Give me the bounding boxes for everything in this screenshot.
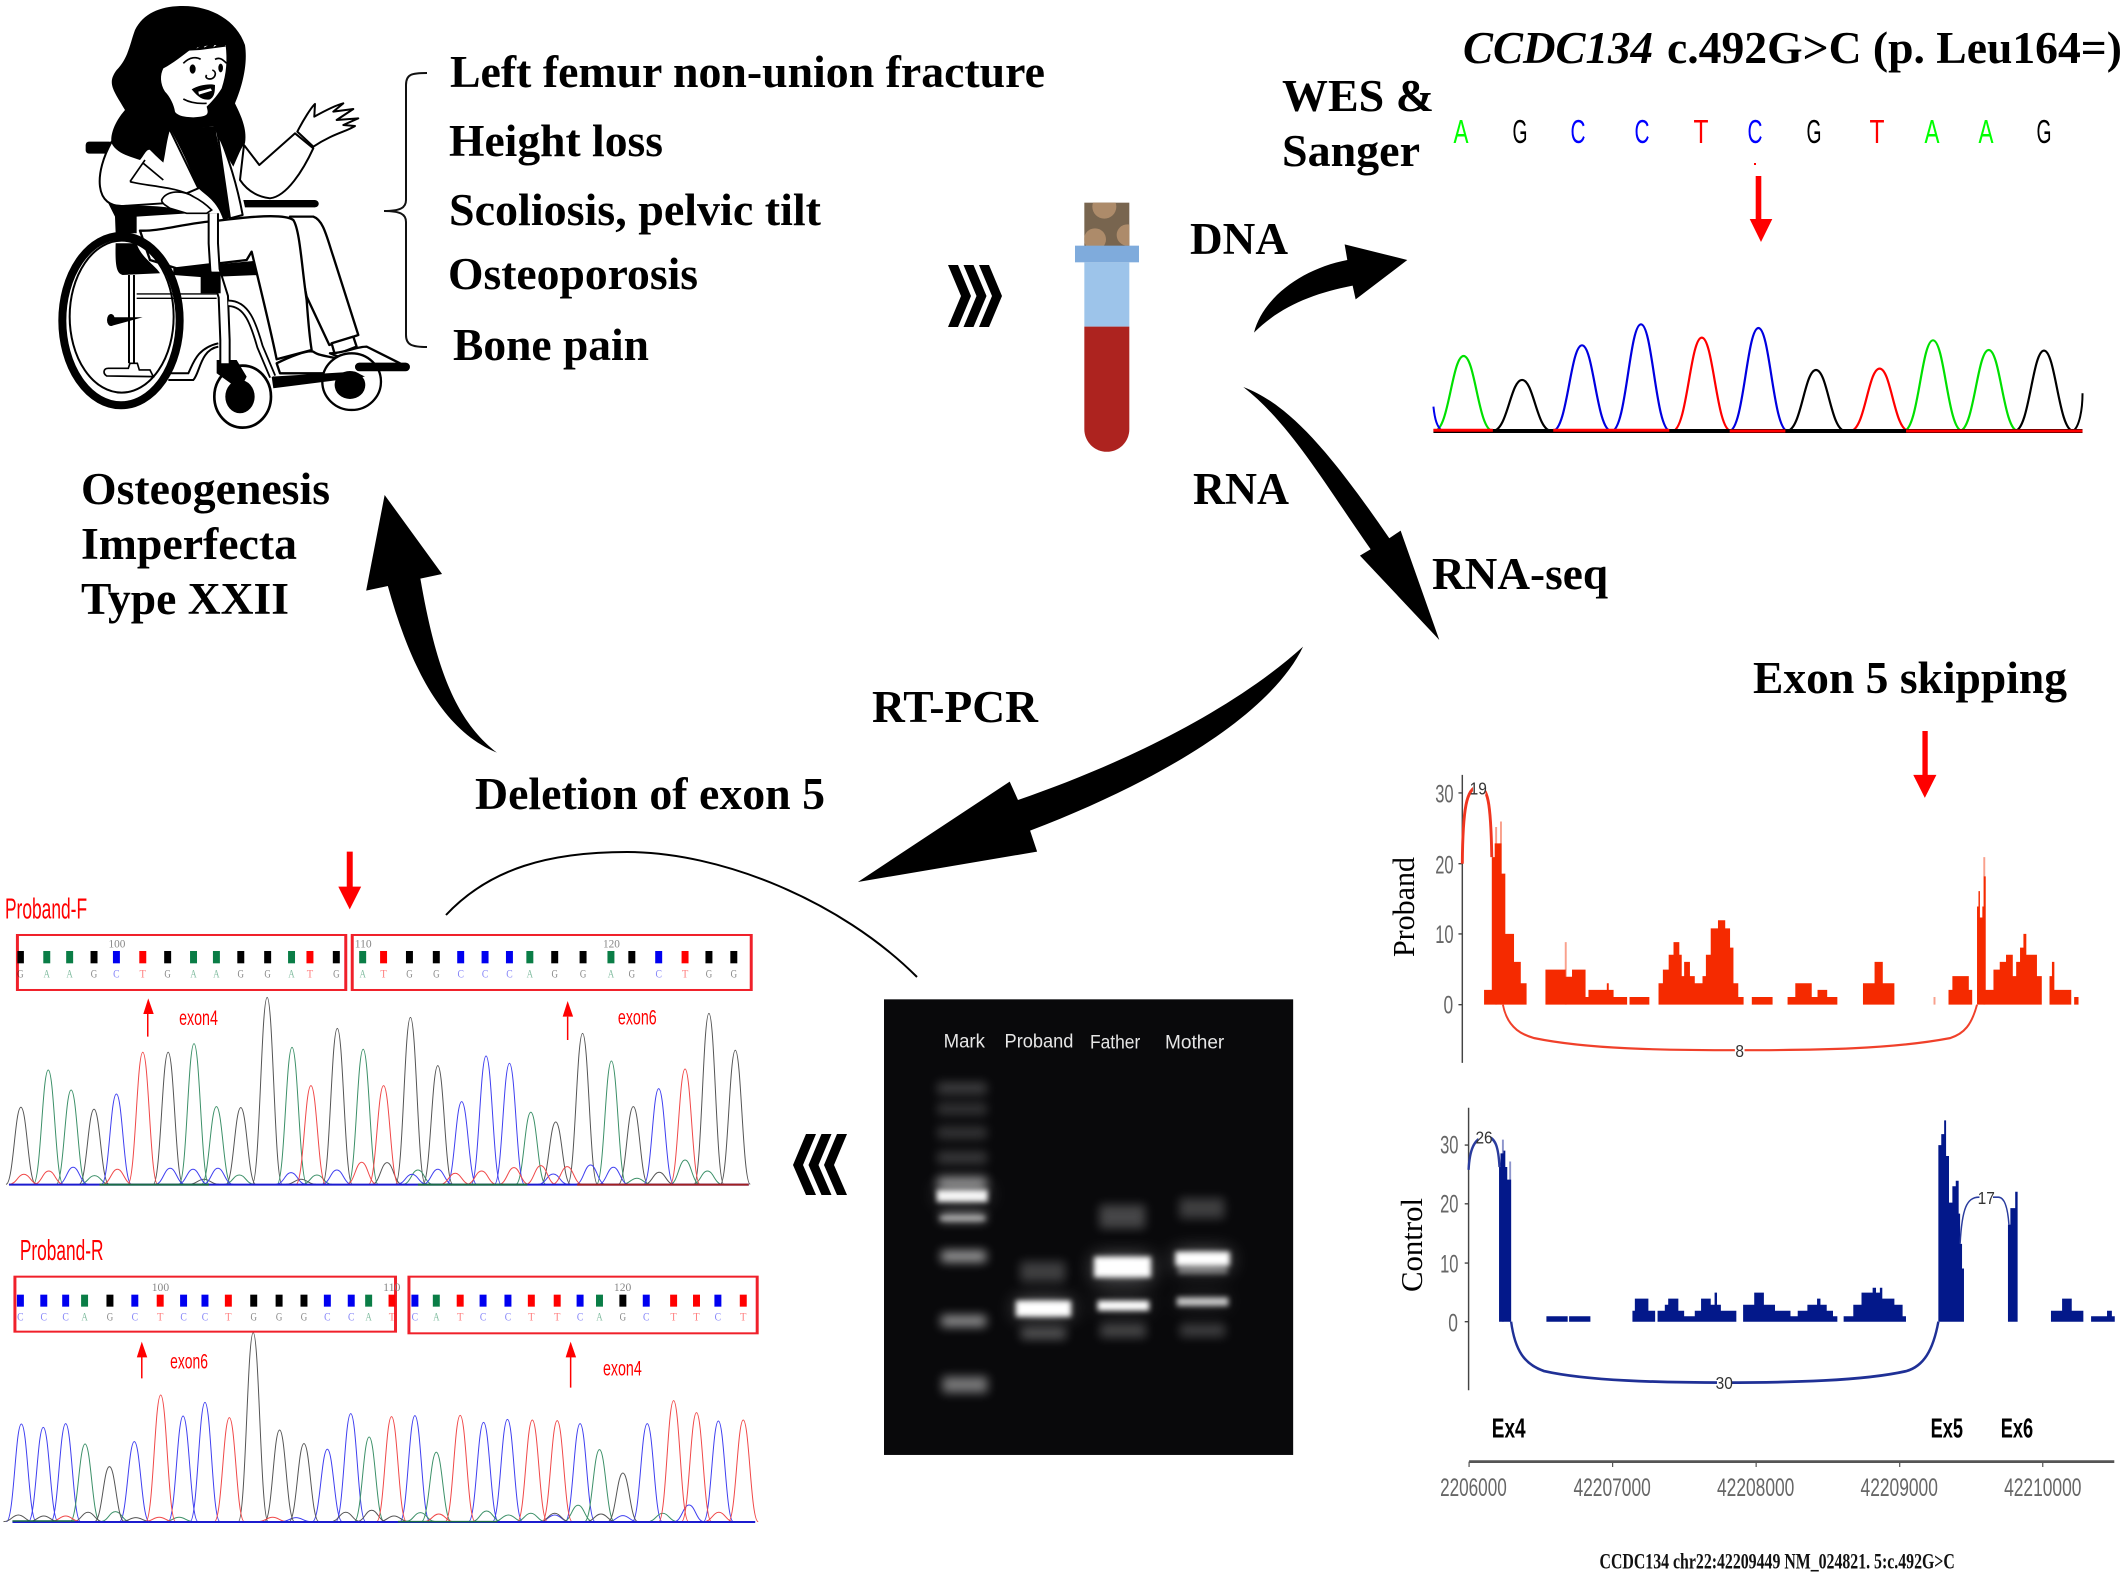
base call letters: C [180, 1310, 187, 1324]
connector arc over gel [446, 852, 917, 977]
base call letters: T [157, 1310, 164, 1324]
diagnosis text [81, 464, 330, 624]
panel: Proband-F sequencing [5, 852, 751, 1185]
base call squares [17, 951, 737, 963]
label: Exon 5 skipping: Exon 5 skipping [1753, 653, 2068, 703]
icon: triple chevron right [948, 265, 1002, 327]
position numbers: 110 [355, 937, 372, 950]
base call letters [17, 1310, 747, 1324]
illustration: patient in wheelchair [62, 6, 410, 428]
label: Deletion of exon 5: Deletion of exon 5 [475, 769, 825, 819]
sequence letters: G [2036, 113, 2052, 150]
base call letters: T [140, 967, 146, 980]
icon: blood tube [1075, 195, 1139, 452]
base call letters: T [670, 1310, 677, 1324]
base call letters: T [225, 1310, 232, 1324]
label: DNA: DNA [1190, 214, 1288, 264]
base call letters: G [620, 1310, 626, 1324]
footrest and small wheels [214, 353, 410, 428]
base call letters: C [62, 1310, 69, 1324]
label: RNA: RNA [1193, 464, 1289, 514]
label: WES and Sanger [1282, 71, 1434, 176]
label: RT-PCR: RT-PCR [872, 682, 1038, 732]
arrow: to DNA result [1254, 244, 1407, 333]
Sanger chromatogram [1433, 324, 2083, 431]
lower wheel frame [168, 343, 218, 380]
symptom list: Bone pain [453, 320, 649, 370]
coat and arms [100, 103, 358, 218]
base call letters: G [406, 967, 413, 980]
legs [140, 216, 400, 373]
exon labels: Ex6 [2001, 1414, 2033, 1444]
seat cushion [116, 243, 160, 275]
mutation title: CCDC134 [1463, 23, 1653, 73]
position numbers [108, 937, 620, 950]
gel diffuse bands [938, 1083, 1225, 1393]
proband coverage: 19 [1470, 779, 1487, 799]
symptom list: Osteoporosis [448, 249, 698, 299]
base call letters: G [301, 1310, 307, 1324]
lower wheelchair and legs [62, 213, 410, 428]
sequence letters: A [1454, 113, 1468, 150]
chromatogram F [6, 997, 750, 1184]
base call letters: G [580, 967, 586, 980]
base call letters: C [715, 1310, 721, 1324]
base call letters: A [190, 967, 197, 980]
base call letters: T [307, 967, 314, 980]
face [161, 39, 227, 117]
sequence boxes [17, 935, 751, 990]
label: RNA-seq: RNA-seq [1432, 549, 1608, 599]
proband axis: 20 [1435, 851, 1454, 880]
seat bar [173, 261, 260, 277]
control axis: 10 [1440, 1250, 1458, 1279]
base call letters: A [527, 967, 533, 980]
exon markers: exon6 [170, 1349, 208, 1373]
diagnosis text: Imperfecta [81, 519, 297, 569]
base call letters: C [655, 967, 662, 980]
gel glow [937, 1187, 1230, 1317]
sequence letters: A [1924, 113, 1940, 150]
base call letters: C [480, 1310, 486, 1324]
base call letters: G [276, 1310, 282, 1324]
control coverage: 30 [1716, 1373, 1733, 1393]
gel bright bands [937, 1190, 1230, 1317]
control coverage [1469, 1120, 2115, 1393]
proband coverage [1462, 779, 2079, 1061]
base call letters [17, 967, 737, 980]
sequence letters: C [1634, 113, 1650, 150]
wheelchair handle [86, 142, 112, 154]
proband axis: 10 [1435, 921, 1454, 950]
red arrow: exon 5 skipping [1913, 731, 1936, 798]
base call letters: G [264, 967, 271, 980]
base call letters: T [693, 1310, 700, 1324]
icon: triple chevron left [793, 1134, 847, 1195]
base call letters: G [551, 967, 558, 980]
base call letters: T [554, 1310, 561, 1324]
sequence letters: A [1978, 113, 1994, 150]
sashimi plot [1435, 731, 2115, 1574]
exon labels: Ex5 [1931, 1414, 1963, 1444]
symptom bracket [384, 73, 427, 347]
base call letters: G [629, 967, 635, 980]
symptom list [448, 47, 1045, 370]
track label: Proband: Proband [1386, 857, 1421, 957]
position numbers: 110 [383, 1281, 401, 1294]
position numbers: 120 [614, 1281, 632, 1294]
sequence letters: G [1512, 113, 1528, 150]
gel electrophoresis panel [884, 999, 1293, 1455]
gel lane labels: Mark [944, 1031, 985, 1053]
base call letters: C [505, 1310, 511, 1324]
mutation title: c.492G>C (p. Leu164=) [1667, 23, 2122, 73]
base call letters: A [44, 967, 50, 980]
base call letters: C [457, 967, 464, 980]
wheel axle and post [104, 275, 217, 377]
panel: Proband-F sequencing: Proband-F [5, 892, 87, 925]
base call letters: G [91, 967, 97, 980]
panel: Proband-R sequencing: exon4 [603, 1356, 642, 1380]
exon labels: Ex4 [1492, 1414, 1526, 1444]
base call letters: C [17, 1310, 24, 1324]
sequence letters: T [1870, 113, 1884, 150]
track label: Control: Control [1394, 1198, 1429, 1292]
black shirt [170, 127, 231, 220]
genomic x axis: 42207000 [1573, 1474, 1651, 1502]
proband axis [1435, 775, 1462, 1063]
base call letters: C [202, 1310, 208, 1324]
base call letters: G [164, 967, 171, 980]
diagnosis text: Type XXII [81, 574, 289, 624]
position numbers: 120 [603, 937, 620, 950]
control axis: 0 [1448, 1309, 1458, 1338]
base call letters: A [359, 967, 366, 980]
base call squares [17, 1295, 747, 1307]
genomic x axis [1440, 1462, 2114, 1502]
base call letters: G [333, 967, 340, 980]
left hand [162, 192, 212, 213]
sequence letters: C [1570, 113, 1586, 150]
gel lane labels: Mother [1165, 1032, 1225, 1054]
base call letters: T [740, 1310, 747, 1324]
base call letters: C [643, 1310, 649, 1324]
genomic x axis: 42210000 [2004, 1474, 2081, 1502]
base call letters: C [412, 1310, 418, 1324]
red arrow: junction [338, 852, 361, 909]
base call letters: C [482, 967, 488, 980]
base call letters: A [596, 1310, 603, 1324]
big wheel [62, 236, 180, 405]
symptom list: Height loss [449, 116, 663, 166]
base call letters: T [389, 1310, 396, 1324]
base call letters: T [380, 967, 387, 980]
base call letters: A [365, 1310, 372, 1324]
variant caption: CCDC134 chr22:42209449 NM_024821. 5:c.492G>C [1600, 1550, 1955, 1574]
panel: Proband-F sequencing: G [731, 967, 737, 980]
sequence letters: G [1806, 113, 1822, 150]
exon labels [1492, 1414, 2033, 1444]
genomic x axis: 2206000 [1440, 1474, 1507, 1502]
hair [111, 6, 246, 167]
red arrow: mutation site [1750, 163, 1772, 242]
control coverage: 17 [1978, 1188, 1995, 1208]
gel lane labels [944, 1031, 1225, 1054]
control axis [1440, 1108, 1469, 1390]
arrow: to RNA-seq [1243, 387, 1439, 640]
sequence letters: C [1748, 113, 1762, 150]
base call letters: T [682, 967, 689, 980]
control axis: 30 [1440, 1131, 1458, 1160]
control coverage: 26 [1475, 1128, 1493, 1148]
frame tube [201, 213, 273, 377]
symptom list: Left femur non-union fracture [450, 47, 1045, 97]
position numbers: 100 [108, 937, 126, 950]
base call letters: T [528, 1310, 535, 1324]
exon markers: exon4 [179, 1005, 218, 1030]
proband axis: 30 [1435, 780, 1454, 809]
exon markers [137, 1342, 642, 1388]
base call letters: T [457, 1310, 464, 1324]
base call letters: G [250, 1310, 257, 1324]
diagnosis text: Osteogenesis [81, 464, 330, 514]
label: WES and Sanger: WES & [1282, 71, 1434, 121]
sequence letters [1454, 113, 2052, 150]
base call letters: A [81, 1310, 88, 1324]
base call letters: C [348, 1310, 354, 1324]
base call letters: C [41, 1310, 47, 1324]
armrests [108, 200, 319, 233]
symptom list: Scoliosis, pelvic tilt [449, 185, 821, 235]
genomic x axis: 42209000 [1861, 1474, 1938, 1502]
gel lane labels: Father [1090, 1032, 1141, 1054]
sequence letters: T [1694, 113, 1708, 150]
base call letters: C [577, 1310, 583, 1324]
panel: Proband-R sequencing [3, 1234, 758, 1522]
base call letters: A [66, 967, 73, 980]
base call letters: G [17, 967, 24, 980]
proband axis: 0 [1443, 991, 1453, 1020]
position numbers: 100 [152, 1281, 169, 1294]
gel lane labels: Proband [1005, 1031, 1073, 1053]
base call letters: A [608, 967, 614, 980]
base call letters: G [706, 967, 712, 980]
base call letters: A [213, 967, 220, 980]
base call letters: C [113, 967, 120, 980]
base call letters: A [288, 967, 295, 980]
base call letters: G [238, 967, 244, 980]
control axis: 20 [1440, 1190, 1458, 1219]
chromatogram R [3, 1333, 758, 1522]
arrow: RT-PCR to gel [858, 647, 1303, 882]
mutation title [1463, 23, 2122, 73]
sequence boxes [15, 1277, 757, 1333]
exon markers [143, 998, 657, 1040]
base call letters: A [433, 1310, 440, 1324]
base call letters: C [324, 1310, 331, 1324]
base call letters: G [433, 967, 440, 980]
proband coverage: 8 [1735, 1041, 1744, 1061]
panel: Proband-R sequencing: Proband-R [20, 1234, 103, 1266]
base call letters: G [107, 1310, 113, 1324]
arrow: to diagnosis [366, 495, 497, 753]
panel: Proband-F sequencing: exon6 [618, 1005, 657, 1029]
genomic x axis: 42208000 [1717, 1474, 1794, 1502]
base call letters: C [132, 1310, 138, 1324]
base call letters: C [506, 967, 513, 980]
label: WES and Sanger: Sanger [1282, 126, 1420, 176]
position numbers [152, 1281, 632, 1294]
